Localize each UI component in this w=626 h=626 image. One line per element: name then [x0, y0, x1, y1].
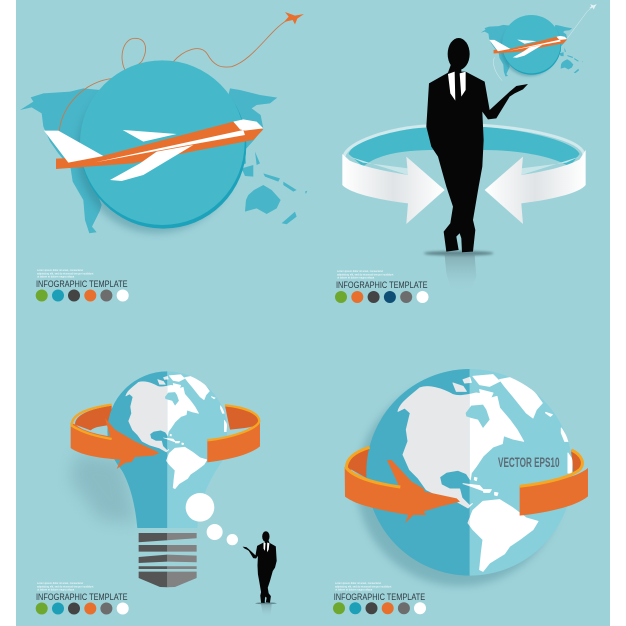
colour swatches — [335, 291, 428, 303]
template title: ut labore et dolore magna aliqua — [37, 588, 75, 592]
bulb base — [139, 533, 167, 587]
businessman silhouette — [426, 38, 528, 252]
globe illustration — [345, 366, 588, 586]
template title: ut labore et dolore magna aliqua — [337, 276, 375, 280]
template title: ut labore et dolore magna aliqua — [37, 275, 75, 279]
colour swatches — [36, 290, 129, 302]
orange ring with plane — [71, 418, 159, 469]
panel: plane over world map — [20, 12, 307, 301]
shadow and reflection — [424, 251, 494, 295]
template title: Lorem ipsum dolor sit amet, consectetur — [37, 581, 83, 585]
colour swatches — [36, 602, 129, 614]
panel: light bulb globe — [36, 369, 277, 618]
globe — [105, 369, 229, 493]
small businessman — [243, 531, 277, 618]
template title: Lorem ipsum dolor sit amet, consectetur — [337, 269, 383, 273]
template title: adipisicing elit, sed do eiusmod tempor incididunt — [335, 584, 392, 588]
template title: INFOGRAPHIC TEMPLATE — [36, 592, 128, 603]
vector label: VECTOR EPS10 — [498, 455, 560, 470]
mini plane globe — [481, 4, 597, 80]
panel: businessman with arrows — [335, 4, 597, 303]
ring with two arrows — [342, 125, 586, 224]
illustration: plane and circle over map — [20, 12, 307, 233]
template title: INFOGRAPHIC TEMPLATE — [336, 280, 428, 291]
template title: adipisicing elit, sed do eiusmod tempor incididunt — [337, 272, 394, 276]
template title: INFOGRAPHIC TEMPLATE — [334, 592, 425, 603]
template title — [36, 581, 128, 603]
template title — [36, 268, 128, 290]
template title: ut labore et dolore magna aliqua — [335, 588, 373, 592]
template title: adipisicing elit, sed do eiusmod tempor incididunt — [37, 271, 94, 275]
template title — [336, 269, 428, 291]
template title: Lorem ipsum dolor sit amet, consectetur — [37, 268, 83, 272]
panel: large globe with orange arrow — [333, 366, 588, 614]
bubbles — [186, 493, 214, 522]
bulb illustration — [70, 369, 260, 587]
template title: INFOGRAPHIC TEMPLATE — [36, 279, 128, 290]
template title: Lorem ipsum dolor sit amet, consectetur — [335, 581, 381, 585]
colour swatches — [333, 602, 426, 614]
orange ring with plane — [345, 460, 460, 523]
template title: adipisicing elit, sed do eiusmod tempor incididunt — [37, 584, 94, 588]
template title — [334, 581, 425, 603]
